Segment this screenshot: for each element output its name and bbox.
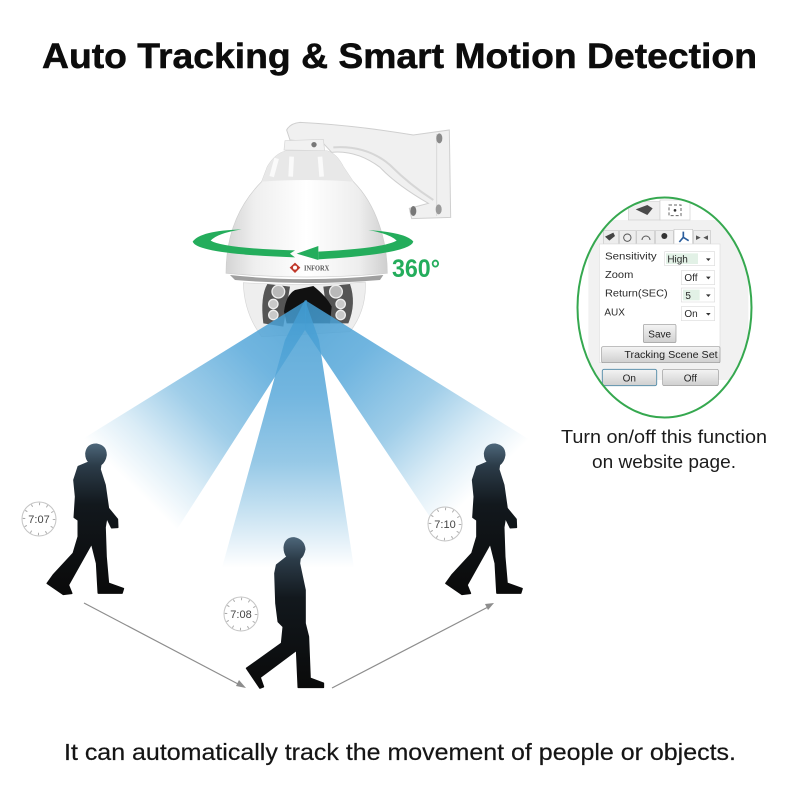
clock 7:08 (224, 597, 258, 631)
person at 7:08 (247, 538, 323, 688)
top tabs (628, 200, 690, 220)
person at 7:07 (47, 444, 123, 594)
return row: 5 (685, 291, 691, 302)
right view beam (305, 300, 562, 532)
green 360 rotation ring (193, 229, 413, 260)
brand logo: INFORX (304, 264, 329, 272)
arrow from first to second position (84, 603, 246, 688)
off button (663, 369, 718, 386)
clock 7:10 (428, 507, 462, 541)
settings panel (578, 198, 752, 418)
return row: Return(SEC) (605, 289, 668, 300)
green ellipse outline (578, 198, 752, 418)
sensitivity row: Sensitivity (605, 251, 657, 262)
clock 7:08: 7:08 (230, 609, 252, 621)
brand logo (290, 263, 329, 273)
caption: on website page. (592, 452, 736, 472)
clock 7:10: 7:10 (434, 519, 456, 531)
centre view beam (220, 300, 355, 575)
aux row (604, 307, 715, 321)
zoom row (605, 270, 715, 285)
icon tabs (603, 229, 711, 245)
clock 7:07 (22, 502, 56, 536)
wall bracket (287, 122, 451, 219)
on button: On (623, 374, 636, 385)
save button (643, 324, 676, 343)
tracking scene button (602, 347, 720, 363)
aux row: AUX (604, 307, 625, 318)
off button: Off (684, 374, 697, 385)
arrow from second to third position (332, 603, 494, 688)
zoom row: Zoom (605, 270, 633, 281)
person at 7:10 (446, 444, 522, 594)
save button: Save (648, 329, 671, 340)
title: Auto Tracking & Smart Motion Detection (42, 37, 757, 76)
360 degree label: 360° (392, 255, 440, 283)
caption: Turn on/off this function (561, 427, 767, 447)
left view beam (60, 300, 307, 537)
sensitivity row (605, 251, 715, 266)
camera (193, 122, 451, 337)
tracking scene button: Tracking Scene Set (624, 350, 718, 361)
form area (599, 244, 720, 362)
on button (602, 369, 657, 386)
caption (561, 427, 767, 472)
return row (605, 288, 715, 302)
lower camera housing (243, 282, 365, 337)
bottom caption: It can automatically track the movement of people or objects. (64, 739, 736, 765)
sensitivity row: High (667, 255, 688, 266)
zoom row: Off (684, 273, 698, 284)
panel contents (588, 200, 748, 386)
aux row: On (684, 309, 698, 320)
dome housing (226, 139, 387, 283)
clock 7:07: 7:07 (28, 514, 50, 526)
